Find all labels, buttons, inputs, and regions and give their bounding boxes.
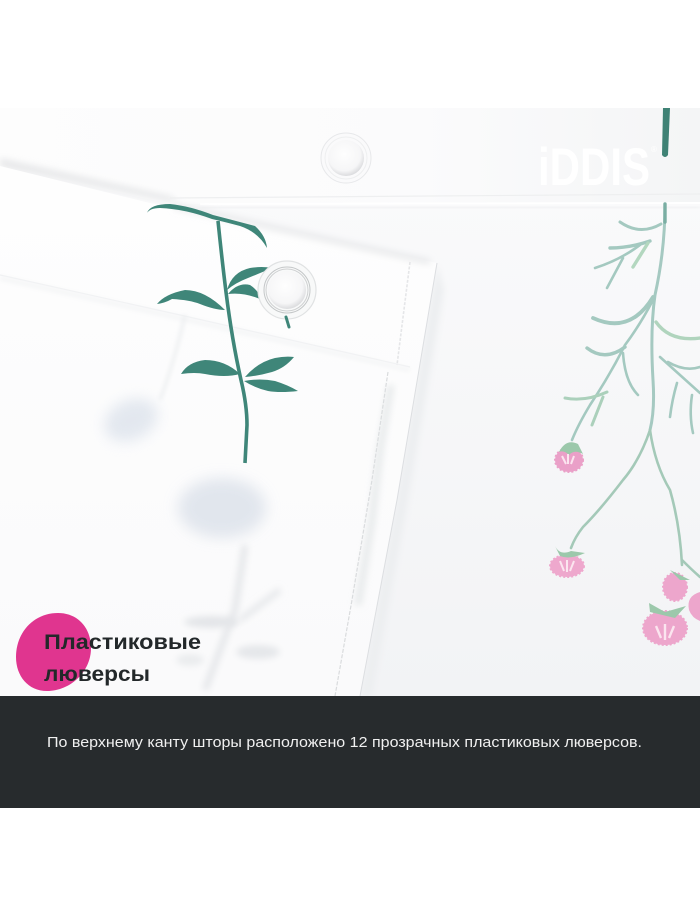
icon: pink flower buds <box>550 442 700 645</box>
heading: Пластиковые <box>44 631 201 654</box>
heading: люверсы <box>44 663 150 686</box>
panel: curtain photo <box>0 108 700 696</box>
panel: folded corner of the curtain <box>0 166 444 696</box>
panel: dark caption band <box>0 696 700 808</box>
decoration: pink blob behind heading <box>16 613 91 691</box>
logo: iDDIS <box>538 138 650 197</box>
logo: ® <box>651 145 657 154</box>
icon: green and pink hanging plant <box>565 204 700 577</box>
shadow: plant showing through the fabric <box>97 315 280 690</box>
icon: grommet on the folded corner <box>258 261 316 327</box>
icon: dark stem above the hem seam <box>662 108 670 157</box>
panel: top hem of the curtain <box>0 108 700 208</box>
heading <box>44 631 201 686</box>
icon: grommet on the top hem <box>321 133 371 183</box>
caption text: По верхнему канту шторы расположено 12 прозрачных пластиковых люверсов. <box>47 735 642 751</box>
icon: green sprig on the folded corner <box>147 204 298 463</box>
